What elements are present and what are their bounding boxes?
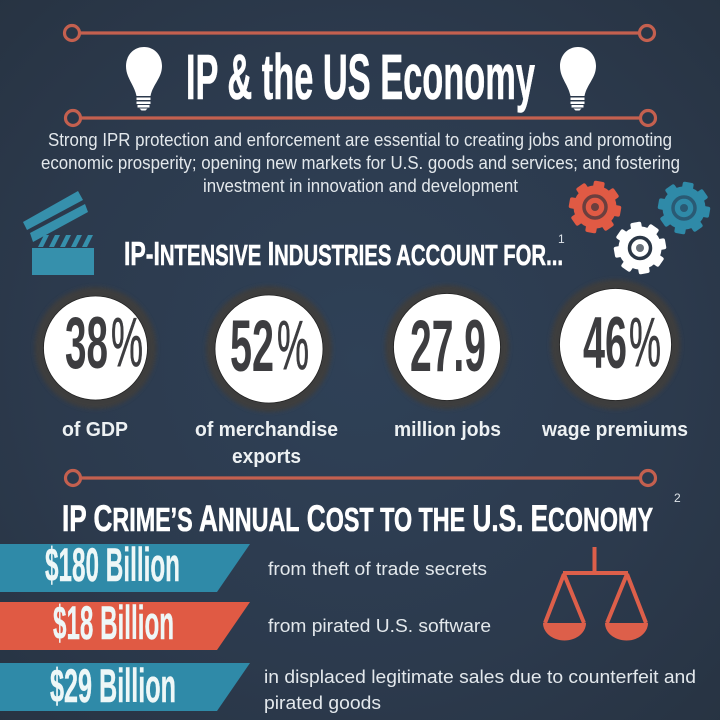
stat: 52% of merchandise exports: of merchandise	[195, 419, 338, 441]
stat: 52% of merchandise exports: %	[277, 306, 309, 384]
third rule	[66, 470, 656, 486]
icon: clapperboard	[23, 191, 94, 275]
stat: 38% of GDP: %	[111, 303, 143, 381]
top rule	[64, 26, 654, 40]
icon: blue gear	[654, 178, 714, 238]
text: displaced sales: in displaced legitimate sales due to counterfeit and	[264, 666, 696, 687]
icon: balance scales	[543, 547, 648, 640]
text: displaced sales	[264, 666, 696, 713]
stat: 27.9 million jobs: million jobs	[394, 419, 501, 441]
footnote marker 1: 1	[558, 232, 565, 246]
footnote marker 2: 2	[674, 491, 681, 505]
intro text: investment in innovation and development	[203, 175, 518, 196]
stat: 52% of merchandise exports: exports	[232, 446, 301, 468]
text: displaced sales: pirated goods	[264, 692, 381, 713]
icon: left light bulb	[126, 47, 162, 110]
stat: 46% wage premiums: %	[629, 303, 661, 381]
banner: $180 Billion	[0, 538, 250, 592]
icon: right light bulb	[560, 47, 596, 110]
stat: 46% wage premiums	[541, 280, 688, 441]
intro text	[41, 129, 680, 196]
heading: IP-intensive industries: IP-INTENSIVE INDUSTRIES ACCOUNT FOR...	[124, 235, 563, 272]
banner: $180 Billion: $180 Billion	[45, 538, 180, 591]
stat: 46% wage premiums: wage premiums	[541, 419, 688, 441]
text: trade secrets: from theft of trade secrets	[268, 558, 487, 579]
stat: 27.9 million jobs: 27.9	[410, 306, 486, 387]
icon: white gear	[610, 218, 670, 278]
stat: 46% wage premiums: 46	[583, 303, 627, 384]
banner: $18 Billion: $18 Billion	[53, 596, 174, 649]
second rule	[66, 110, 656, 126]
icon: orange gear	[565, 177, 625, 237]
stat: 38% of GDP: of GDP	[62, 419, 128, 441]
stat: 38% of GDP: 38	[65, 303, 108, 384]
intro text: Strong IPR protection and enforcement are essential to creating jobs and promoting	[48, 129, 672, 150]
heading: IP crime cost: IP CRIME’S ANNUAL COST TO THE U.S. ECONOMY	[62, 498, 653, 539]
banner: $29 Billion: $29 Billion	[50, 659, 176, 712]
text: pirated software: from pirated U.S. software	[268, 615, 491, 636]
stat: 38% of GDP	[34, 287, 156, 441]
banner: $18 Billion	[0, 596, 250, 650]
stat: 52% of merchandise exports	[195, 286, 338, 468]
stat: 27.9 million jobs	[385, 285, 509, 441]
stat: 52% of merchandise exports: 52	[230, 306, 274, 387]
